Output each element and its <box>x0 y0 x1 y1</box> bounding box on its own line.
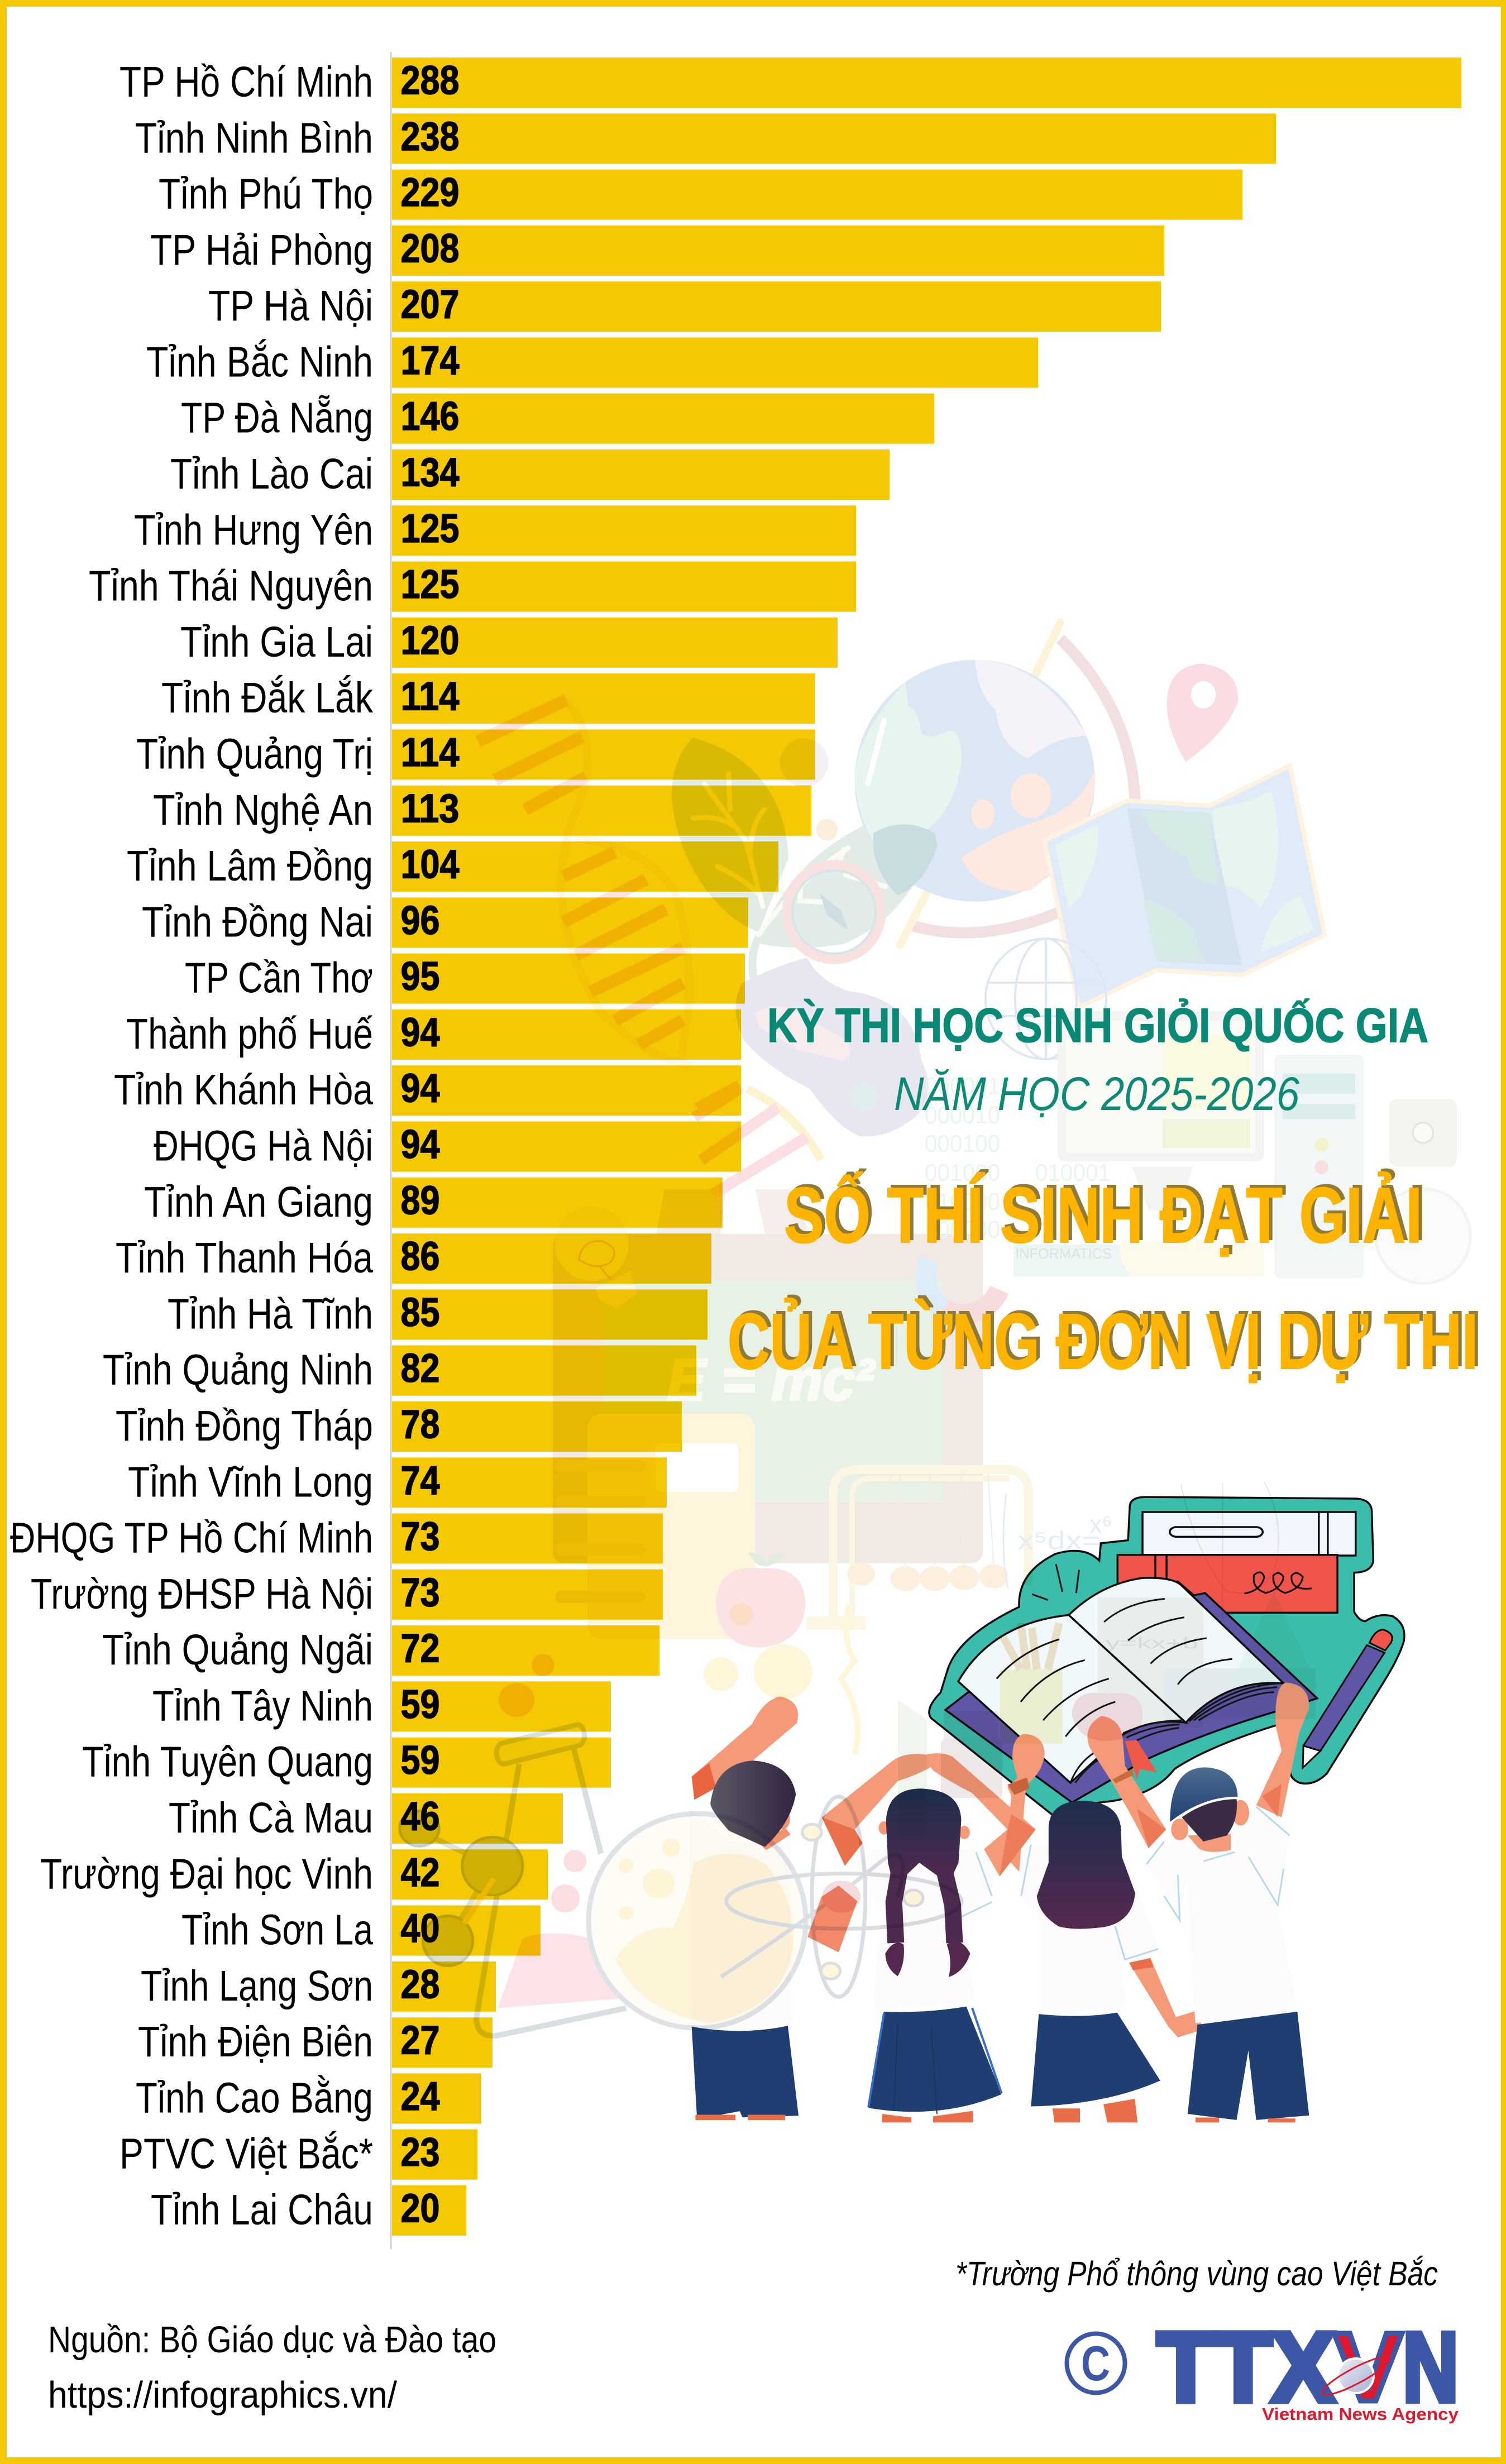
chart axis line <box>390 52 392 2249</box>
row: TP Hải Phòng: TP Hải Phòng <box>150 226 373 274</box>
row: Trường Đại học Vinh: Trường Đại học Vinh <box>40 1850 373 1898</box>
row: Tỉnh Bắc Ninh: Tỉnh Bắc Ninh <box>146 338 373 386</box>
faded school items over the book <box>944 1482 1319 1797</box>
row: Tỉnh Lào Cai: Tỉnh Lào Cai <box>170 450 373 498</box>
faded molecule <box>400 1811 523 1966</box>
row: Tỉnh Hưng Yên: 125 <box>401 506 459 551</box>
faded background illustrations <box>400 623 1470 2036</box>
row: Tỉnh Gia Lai: Tỉnh Gia Lai <box>180 618 373 666</box>
student: girl with braids <box>822 1753 1036 2122</box>
row: Trường ĐHSP Hà Nội <box>31 1570 663 1620</box>
logo tagline: Vietnam News Agency <box>1262 2404 1459 2424</box>
faded binary code: 010001 <box>1035 1159 1111 1186</box>
row: Tỉnh Ninh Bình: Tỉnh Ninh Bình <box>135 114 373 162</box>
row: Tỉnh Tuyên Quang: 59 <box>401 1738 440 1783</box>
row: Tỉnh Gia Lai: 120 <box>401 618 459 663</box>
row: TP Hà Nội: TP Hà Nội <box>208 282 373 330</box>
faded binary code: 000100 <box>925 1130 1000 1157</box>
row: Tỉnh Sơn La: 40 <box>401 1906 440 1951</box>
row: ĐHQG Hà Nội: ĐHQG Hà Nội <box>154 1122 373 1170</box>
right book page <box>1069 1578 1284 1723</box>
faded round flask <box>589 1814 806 2028</box>
row: TP Đà Nẵng <box>181 394 934 444</box>
row: PTVC Việt Bắc*: PTVC Việt Bắc* <box>119 2130 373 2178</box>
row: Tỉnh Hưng Yên <box>134 505 856 556</box>
row: Tỉnh Vĩnh Long <box>128 1457 667 1508</box>
row: Tỉnh Tây Ninh: 59 <box>401 1682 440 1727</box>
faded notebook <box>561 1414 755 1639</box>
row: Tỉnh Lâm Đồng <box>127 841 778 892</box>
faded light bulb <box>554 1207 637 1308</box>
row: Thành phố Huế: 94 <box>401 1010 440 1055</box>
row: Tỉnh Nghệ An: Tỉnh Nghệ An <box>153 786 373 834</box>
row: Tỉnh An Giang <box>144 1178 723 1228</box>
row: ĐHQG Hà Nội <box>154 1121 741 1171</box>
row: Tỉnh Lào Cai <box>170 449 890 500</box>
row: Tỉnh Phú Thọ: 229 <box>401 170 459 215</box>
faded location pin <box>1167 663 1238 762</box>
row: TP Hồ Chí Minh: TP Hồ Chí Minh <box>119 58 373 106</box>
row: Tỉnh Nghệ An <box>153 786 811 836</box>
row: PTVC Việt Bắc*: 23 <box>401 2130 440 2175</box>
agency letters: TTX <box>1157 2313 1335 2422</box>
website: https://infographics.vn/ <box>48 2374 397 2416</box>
faded blackboard <box>553 1189 983 1563</box>
faded binary code: 010000 <box>925 1188 1000 1216</box>
row: TP Cần Thơ: TP Cần Thơ <box>185 954 373 1002</box>
faded wire globe <box>986 939 1106 1059</box>
row: Tỉnh Khánh Hòa <box>114 1065 741 1116</box>
row: Tỉnh Đồng Nai <box>142 897 748 948</box>
row: Tỉnh Hà Tĩnh: Tỉnh Hà Tĩnh <box>168 1290 373 1338</box>
row: Tỉnh Vĩnh Long: 74 <box>401 1458 440 1503</box>
row: Tỉnh Sơn La: Tỉnh Sơn La <box>181 1906 373 1954</box>
row: Tỉnh Thái Nguyên: Tỉnh Thái Nguyên <box>89 562 373 610</box>
row: Tỉnh Cà Mau <box>169 1793 563 1844</box>
row: Tỉnh Tuyên Quang <box>82 1738 611 1788</box>
row: Tỉnh Bắc Ninh: 174 <box>401 338 459 383</box>
copyright mark: C <box>1081 2336 1110 2391</box>
faded pie ring <box>926 1259 1000 1314</box>
row: Tỉnh Thái Nguyên: 125 <box>401 562 459 607</box>
faded conical flask <box>476 1654 626 2036</box>
row: Tỉnh Cà Mau: Tỉnh Cà Mau <box>169 1794 373 1842</box>
row: Tỉnh Đắk Lắk <box>161 673 815 724</box>
row: Tỉnh Lai Châu: 20 <box>401 2186 440 2231</box>
row: Tỉnh Đồng Tháp: 78 <box>401 1403 440 1447</box>
faded binary code: 000001 <box>925 1073 1000 1100</box>
row: Tỉnh Gia Lai <box>180 618 838 668</box>
row: Tỉnh Tây Ninh: Tỉnh Tây Ninh <box>152 1682 373 1730</box>
row: Tỉnh Lai Châu: Tỉnh Lai Châu <box>151 2186 373 2234</box>
faded folded map <box>1044 765 1325 1007</box>
row: Tỉnh Quảng Trị: Tỉnh Quảng Trị <box>136 730 373 778</box>
pencil <box>1303 1630 1392 1768</box>
row: Tỉnh Hưng Yên: Tỉnh Hưng Yên <box>134 506 373 554</box>
stacked red book <box>1117 1555 1337 1613</box>
row: Tỉnh Điện Biên: Tỉnh Điện Biên <box>138 2018 373 2066</box>
row: Tỉnh An Giang: Tỉnh An Giang <box>144 1178 373 1226</box>
faded monitor <box>1013 1011 1470 1283</box>
row: Tỉnh Nghệ An: 113 <box>401 786 459 831</box>
row: TP Cần Thơ: 95 <box>401 954 440 999</box>
row: Tỉnh Quảng Trị <box>136 729 815 779</box>
illustration: three students reaching for the book <box>822 1683 1309 2122</box>
faded globe on stand <box>854 623 1135 945</box>
row: Trường ĐHSP Hà Nội: 73 <box>401 1570 440 1615</box>
teal sticker backing <box>929 1497 1404 1815</box>
row: Tỉnh Lào Cai: 134 <box>401 450 459 495</box>
row: Tỉnh Thanh Hóa <box>116 1233 711 1284</box>
row: Tỉnh Tây Ninh <box>152 1681 611 1731</box>
red bookmark <box>1125 1740 1157 1779</box>
row: Tỉnh Đắk Lắk: 114 <box>401 674 459 719</box>
row: Trường Đại học Vinh: 42 <box>401 1850 440 1895</box>
row: Tỉnh Ninh Bình: 238 <box>401 114 459 159</box>
row: Tỉnh Lạng Sơn: 28 <box>401 1962 440 2007</box>
student: boy in cap <box>1146 1683 1309 2122</box>
row: Tỉnh An Giang: 89 <box>401 1178 440 1223</box>
row: Tỉnh Khánh Hòa: 94 <box>401 1066 440 1111</box>
row: TP Hồ Chí Minh: 288 <box>401 58 459 103</box>
row: Thành phố Huế <box>126 1009 741 1060</box>
faded school items over the book: x⁶ <box>1089 1510 1112 1538</box>
row: Tỉnh Quảng Ninh: Tỉnh Quảng Ninh <box>103 1346 373 1394</box>
row: ĐHQG Hà Nội: 94 <box>401 1122 440 1167</box>
row: ĐHQG TP Hồ Chí Minh <box>10 1513 663 1563</box>
faded binary code <box>925 1073 1111 1243</box>
letter N: N <box>1403 2313 1459 2422</box>
row: Tỉnh Quảng Ngãi: Tỉnh Quảng Ngãi <box>102 1626 373 1674</box>
row: ĐHQG TP Hồ Chí Minh: ĐHQG TP Hồ Chí Minh <box>10 1514 373 1562</box>
row: Tỉnh Quảng Ngãi <box>102 1625 659 1676</box>
row: Tỉnh Tuyên Quang: Tỉnh Tuyên Quang <box>82 1738 373 1786</box>
red letter V: V <box>1333 2313 1403 2422</box>
globe with orbit <box>1318 2351 1393 2400</box>
row: Tỉnh Lâm Đồng: 104 <box>401 843 459 887</box>
left book page <box>958 1615 1186 1783</box>
page edges and writing lines <box>997 1564 1280 1783</box>
faded binary code: 100000 <box>925 1216 1000 1243</box>
faded binary code: 001000 <box>925 1159 1000 1186</box>
row: Tỉnh Thanh Hóa: 86 <box>401 1235 440 1279</box>
row: Tỉnh Cà Mau: 46 <box>401 1795 440 1839</box>
row: Tỉnh Đồng Tháp <box>116 1401 682 1452</box>
illustration: student with short hair <box>689 1696 857 2120</box>
row: TP Hà Nội: 207 <box>401 283 459 327</box>
row: Tỉnh Đồng Nai: 96 <box>401 898 440 943</box>
row: Tỉnh Phú Thọ <box>159 170 1242 220</box>
row: Tỉnh Khánh Hòa: Tỉnh Khánh Hòa <box>114 1066 373 1114</box>
row: Tỉnh Sơn La <box>181 1906 541 1956</box>
student: girl raising arm behind <box>1006 1716 1201 2122</box>
row: Tỉnh Cao Bằng: 24 <box>401 2074 440 2119</box>
row: Tỉnh Quảng Ninh: 82 <box>401 1346 440 1391</box>
row: TP Đà Nẵng: 146 <box>401 394 459 439</box>
purple book cover <box>945 1581 1317 1802</box>
row: Tỉnh Phú Thọ: Tỉnh Phú Thọ <box>159 170 373 218</box>
row: Thành phố Huế: Thành phố Huế <box>126 1010 373 1058</box>
faded calculator <box>941 1739 1002 1798</box>
faded atom <box>721 1797 962 1997</box>
row: Tỉnh Lâm Đồng: Tỉnh Lâm Đồng <box>127 842 373 890</box>
row: Tỉnh Đồng Nai: Tỉnh Đồng Nai <box>142 898 373 946</box>
logo: TTXVN <box>1067 2313 1459 2424</box>
faded binary code: 000010 <box>925 1102 1000 1129</box>
row: Tỉnh Lạng Sơn: Tỉnh Lạng Sơn <box>141 1962 373 2010</box>
row: TP Hồ Chí Minh <box>119 58 1461 108</box>
row: Tỉnh Quảng Trị: 114 <box>401 730 459 775</box>
faded blackboard: E = mc² <box>667 1347 876 1413</box>
source: Nguồn: Bộ Giáo dục và Đào tạo <box>48 2319 496 2361</box>
row: TP Cần Thơ <box>185 954 745 1004</box>
row: Tỉnh Hà Tĩnh: 85 <box>401 1290 440 1335</box>
faded helix lower strands <box>694 1089 821 1194</box>
row: Tỉnh Đồng Tháp: Tỉnh Đồng Tháp <box>116 1402 373 1450</box>
row: TP Hải Phòng <box>150 226 1164 276</box>
title line 2: school year: NĂM HỌC 2025-2026 <box>894 1068 1299 1120</box>
faded leaves and compass <box>672 738 931 980</box>
row: Tỉnh Ninh Bình <box>135 113 1276 164</box>
stacked white book <box>1142 1512 1356 1556</box>
row: Tỉnh Bắc Ninh <box>146 337 1038 387</box>
copyright mark <box>1067 2334 1125 2393</box>
row: Tỉnh Hà Tĩnh <box>168 1289 707 1339</box>
faded palette blob <box>736 958 929 1137</box>
faded folder <box>898 1700 927 1837</box>
row: Tỉnh Thái Nguyên <box>89 562 856 612</box>
row: Trường ĐHSP Hà Nội: Trường ĐHSP Hà Nội <box>31 1570 373 1618</box>
faded Newton's cradle and apple <box>704 1470 1028 1754</box>
row: ĐHQG TP Hồ Chí Minh: 73 <box>401 1514 440 1559</box>
faded school items over the book: x⁵dx= <box>1017 1526 1101 1554</box>
illustration: open book and stacked books sticker <box>929 1497 1404 1815</box>
row: TP Hải Phòng: 208 <box>401 226 459 271</box>
row: Tỉnh Vĩnh Long: Tỉnh Vĩnh Long <box>128 1458 373 1506</box>
row: TP Đà Nẵng: TP Đà Nẵng <box>181 394 373 442</box>
row: Tỉnh Quảng Ngãi: 72 <box>401 1626 440 1671</box>
row: Tỉnh Điện Biên: 27 <box>401 2018 440 2063</box>
faded monitor: INFORMATICS <box>1015 1246 1112 1262</box>
faded school items over the book: y=kx+b <box>1106 1634 1199 1652</box>
row: Tỉnh Đắk Lắk: Tỉnh Đắk Lắk <box>161 674 373 722</box>
faded DNA helix <box>478 696 740 1108</box>
row: Tỉnh Quảng Ninh <box>103 1346 696 1396</box>
row: TP Hà Nội <box>208 281 1161 332</box>
row: Tỉnh Thanh Hóa: Tỉnh Thanh Hóa <box>116 1234 373 1282</box>
row: Tỉnh Cao Bằng: Tỉnh Cao Bằng <box>136 2074 373 2122</box>
